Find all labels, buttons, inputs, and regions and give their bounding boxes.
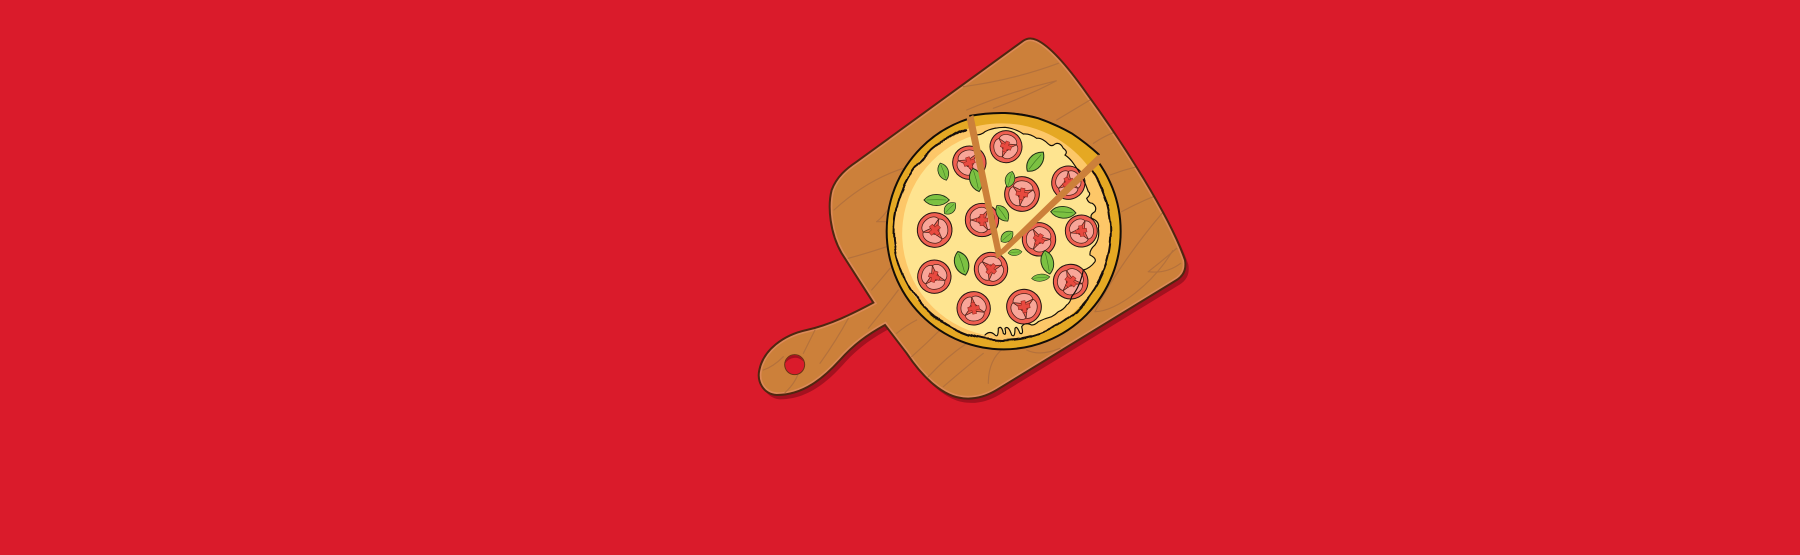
pizza — [887, 113, 1121, 349]
lifted slice crust — [969, 113, 1099, 255]
crust ring line — [894, 129, 1111, 340]
handle hole — [785, 355, 805, 375]
scene — [759, 38, 1189, 403]
tomato slices — [910, 126, 1100, 328]
board shadow — [762, 43, 1189, 403]
basil leaves — [924, 148, 1076, 282]
wooden board — [759, 38, 1185, 399]
wood grain — [763, 63, 1181, 393]
slice cut gap — [967, 115, 1102, 259]
cheese edge line — [975, 127, 1099, 336]
melted cheese fill — [902, 127, 1099, 336]
slice crust outline — [969, 113, 1099, 155]
illustration: pizza on wooden board — [758, 38, 1189, 403]
crust — [887, 113, 1121, 349]
sauce ring fill — [893, 123, 1110, 340]
